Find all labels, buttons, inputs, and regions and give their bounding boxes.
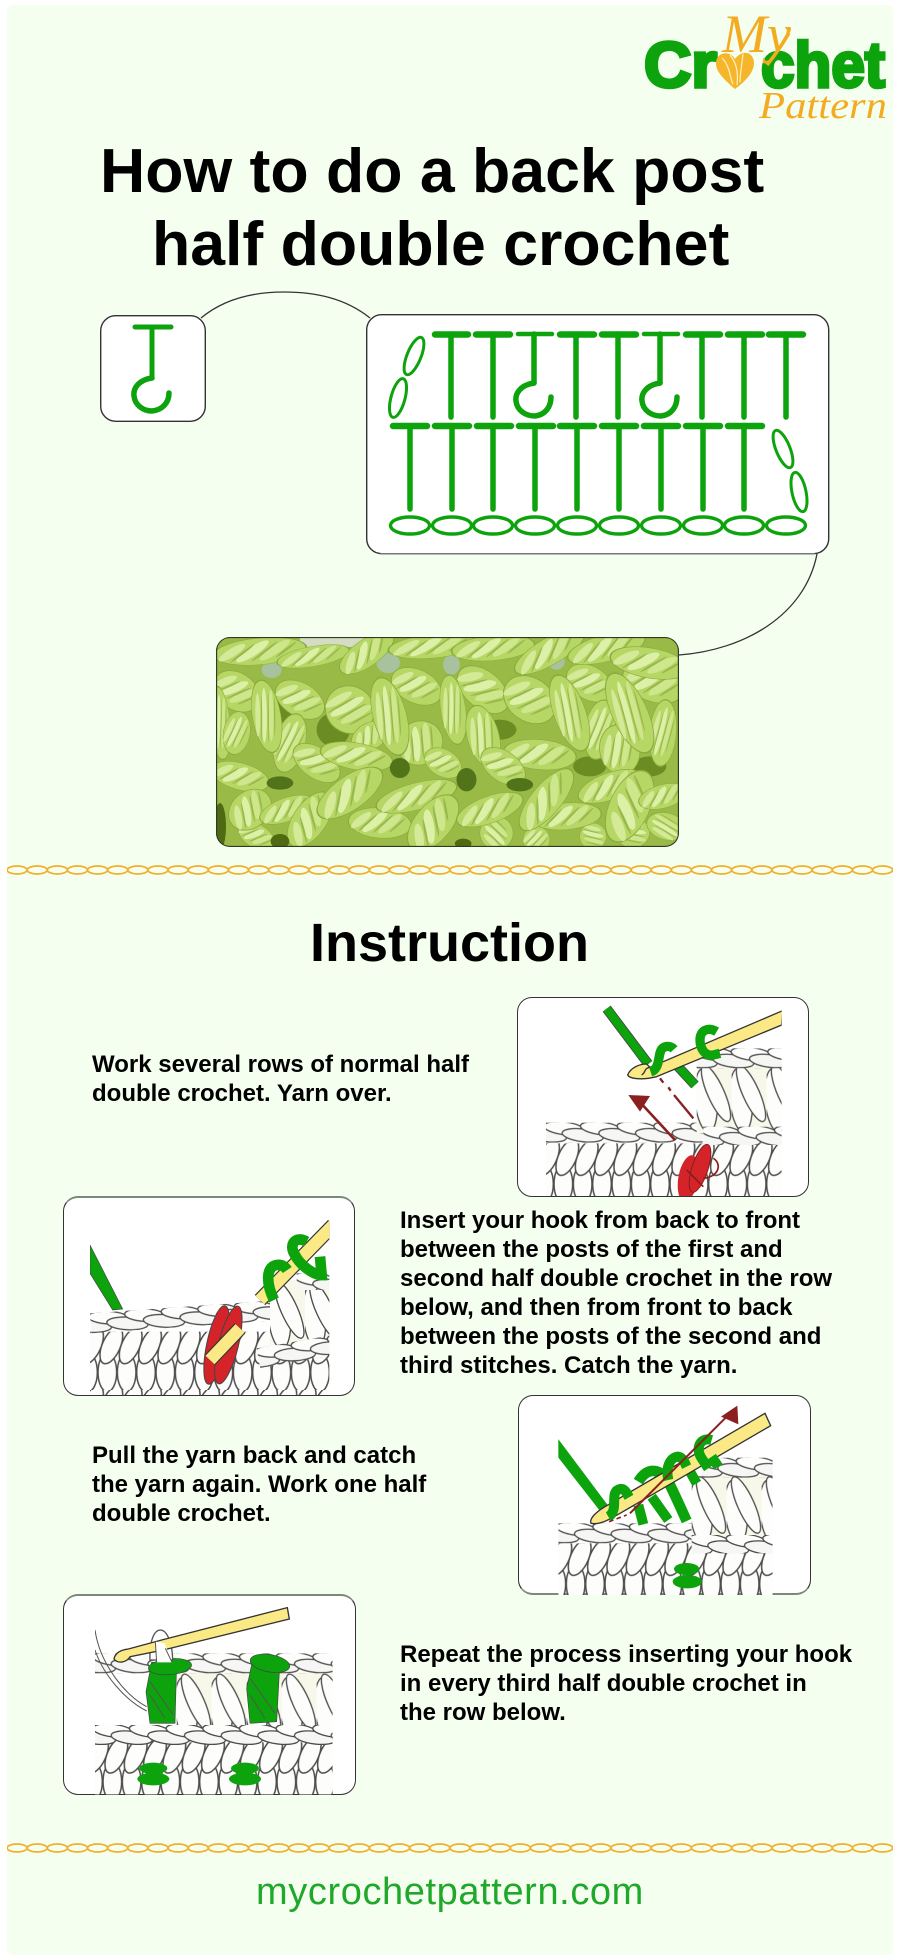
title line 1: How to do a back post (100, 136, 764, 206)
step 2 text (400, 1207, 832, 1379)
logo word: Crochet: Cr (644, 29, 717, 101)
step 1 image (517, 997, 809, 1197)
step 1 text: Work several rows of normal half (92, 1051, 469, 1078)
logo (644, 5, 887, 127)
illustration: pull up loop (558, 1406, 773, 1595)
step 4 text: Repeat the process inserting your hook (400, 1641, 852, 1668)
bottom band (233, 816, 280, 856)
panel: stitch chart (366, 314, 830, 554)
step 2 image (63, 1196, 355, 1396)
step 2 text: second half double crochet in the row (400, 1265, 832, 1292)
title (100, 136, 764, 279)
step 2 text: below, and then from front to back (400, 1294, 792, 1321)
step 4 text: the row below. (400, 1699, 566, 1726)
middle band (286, 735, 347, 791)
divider: yarn chain (7, 865, 893, 875)
title line 2: half double crochet (152, 209, 729, 279)
step 3 text: double crochet. (92, 1500, 271, 1527)
step 4 text: in every third half double crochet in (400, 1670, 807, 1697)
divider: yarn chain (7, 1843, 893, 1853)
logo word: My: My (721, 5, 791, 64)
step 2 text: between the posts of the second and (400, 1323, 821, 1350)
step 2 text: Insert your hook from back to front (400, 1207, 800, 1234)
foundation chain (390, 517, 806, 534)
connector curves (200, 291, 818, 656)
top band (212, 634, 308, 669)
step 3 text (92, 1442, 426, 1527)
illustration: finished row with hook (95, 1606, 333, 1794)
dark gaps between rows (267, 758, 533, 791)
step 3 text: Pull the yarn back and catch (92, 1442, 416, 1469)
step 1 text: double crochet. Yarn over. (92, 1080, 392, 1107)
step 4 image (63, 1594, 356, 1795)
logo word: Crochet (644, 29, 885, 101)
panel: single stitch symbol (100, 315, 206, 422)
photo: crocheted swatch (216, 637, 679, 847)
step 3 image (518, 1395, 811, 1595)
illustration: yarn over (546, 1006, 782, 1196)
logo heart: yarn ball (716, 53, 754, 89)
step 1 text (92, 1051, 470, 1107)
turning chains (386, 335, 810, 513)
logo word: Crochet: chet (761, 29, 885, 101)
gaps (270, 700, 666, 776)
icon: back post hdc symbol (134, 327, 171, 411)
upper stitches (206, 662, 268, 721)
heading: Instruction: Instruction (310, 913, 589, 973)
chart row 1 stitches (393, 426, 762, 509)
logo word: Pattern: Pattern (758, 85, 887, 127)
step 4 text (400, 1641, 852, 1726)
step 2 text: third stitches. Catch the yarn. (400, 1352, 737, 1379)
footer url: mycrochetpattern.com (256, 1871, 644, 1913)
step 2 text: between the posts of the first and (400, 1236, 783, 1263)
chart row 2 stitches (435, 334, 803, 417)
illustration: insert hook between posts (90, 1220, 330, 1395)
step 3 text: the yarn again. Work one half (92, 1471, 426, 1498)
